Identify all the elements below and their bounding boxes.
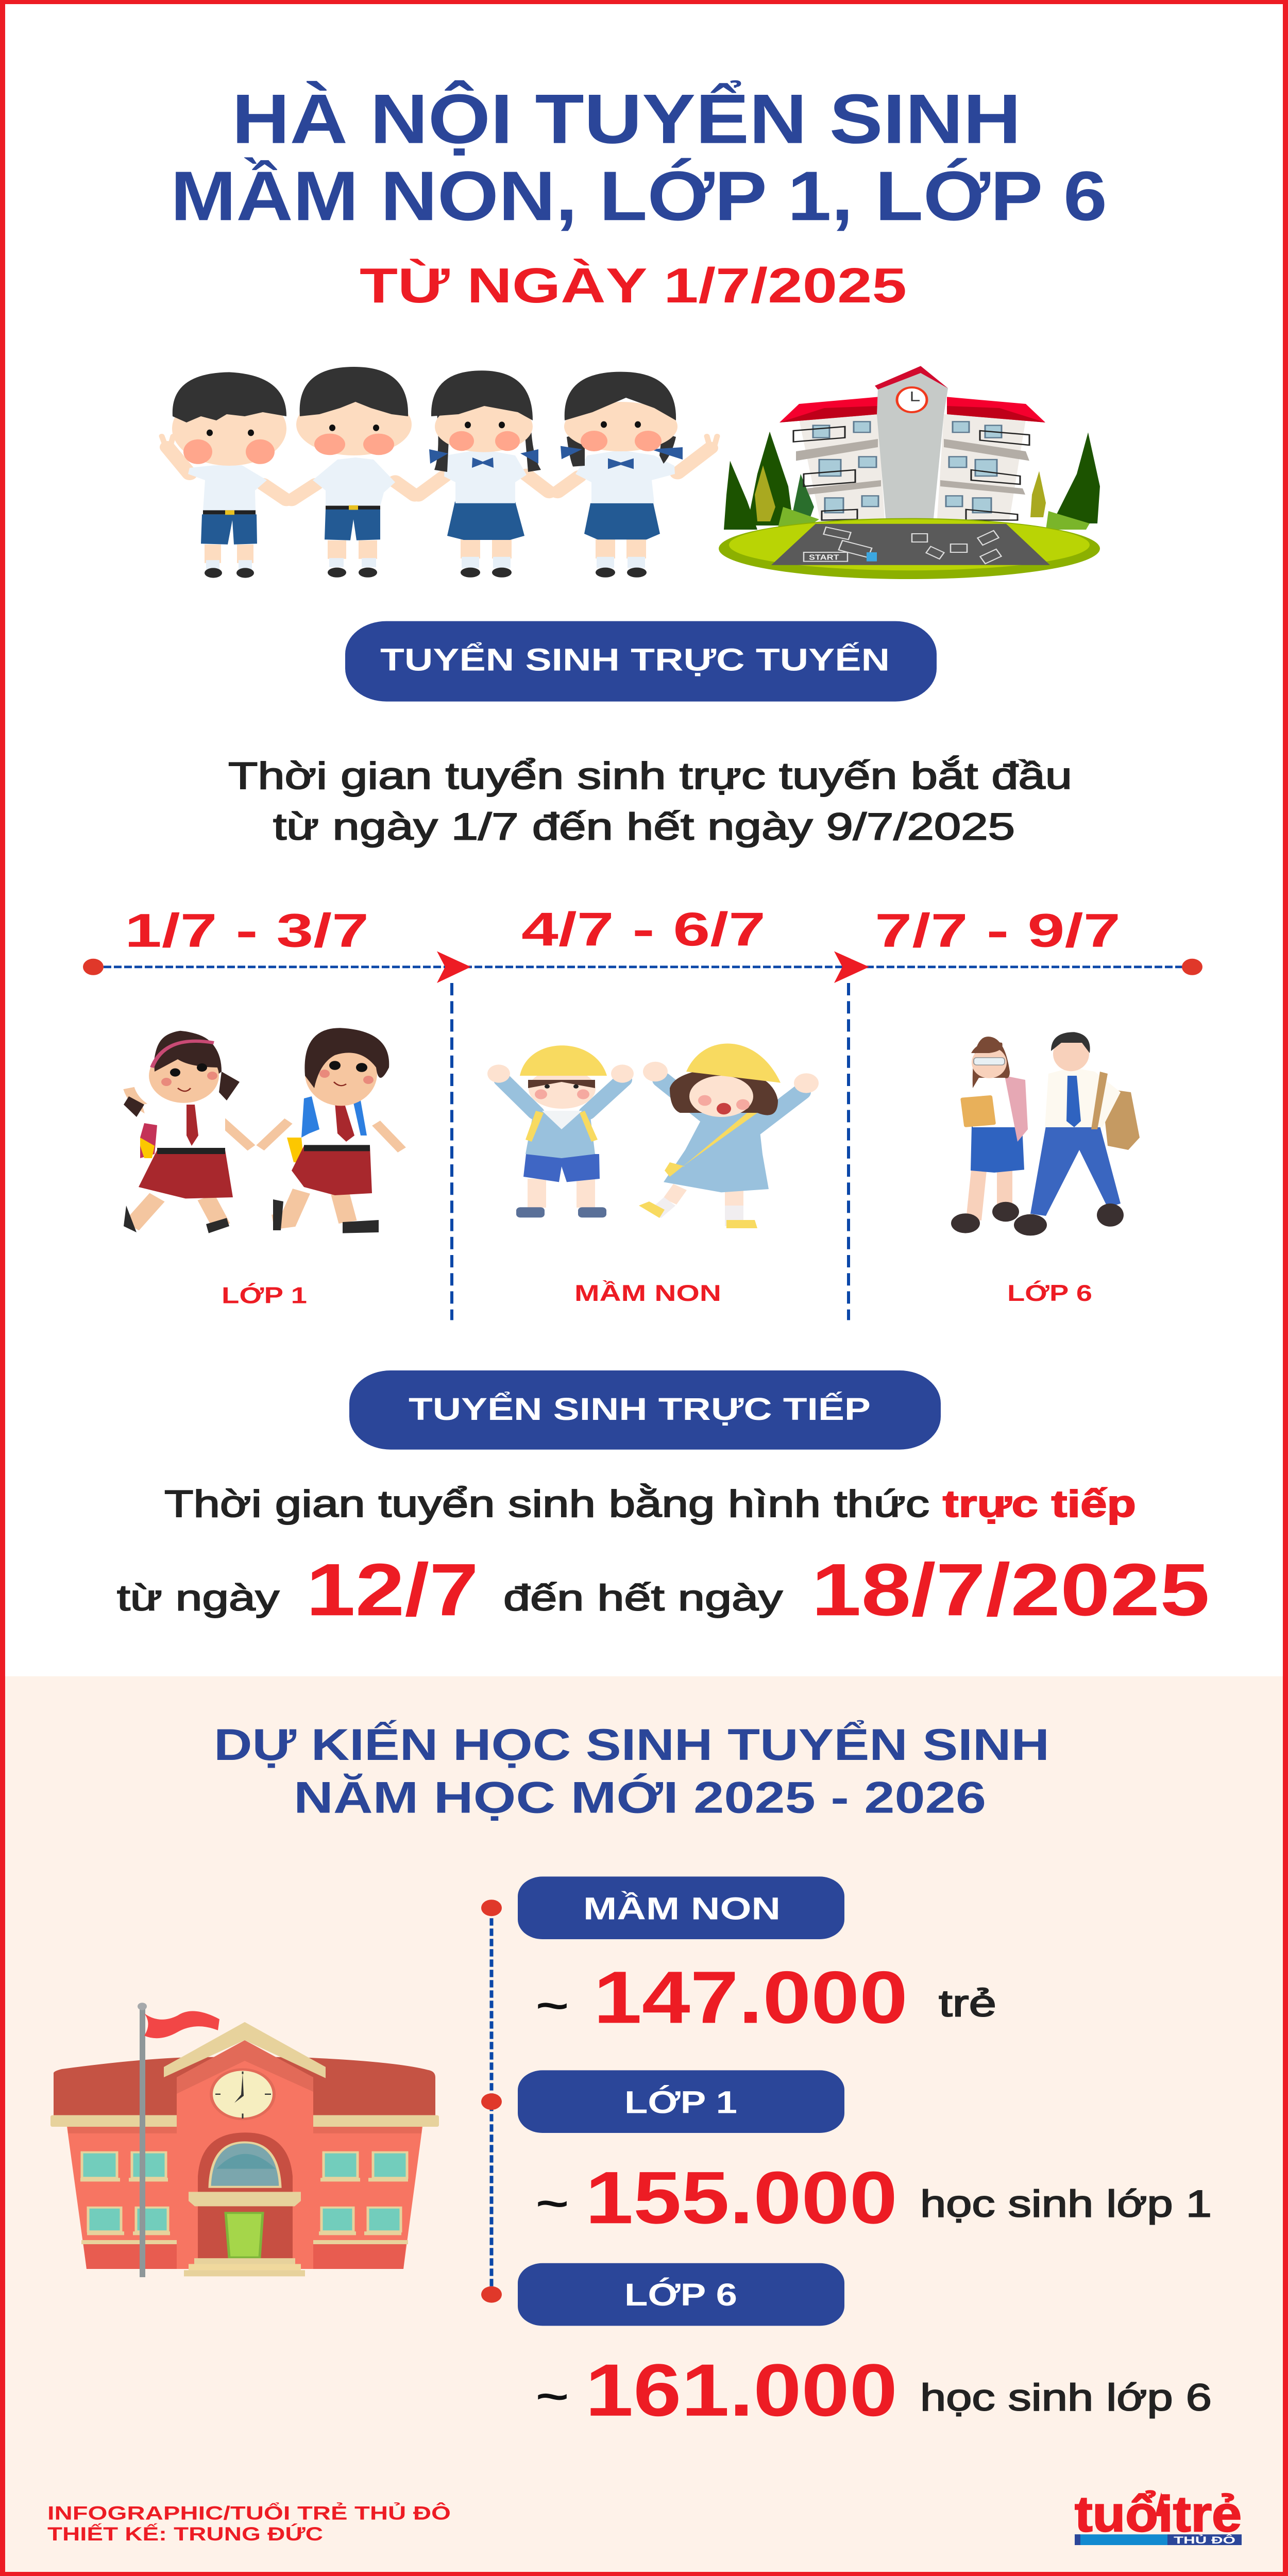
footer credits	[47, 2501, 451, 2545]
title: MẦM NON, LỚP 1, LỚP 6	[171, 157, 1107, 235]
direct admission dates: 18/7/2025	[811, 1548, 1210, 1631]
direct admission dates	[117, 1548, 1210, 1631]
date labels: 7/7 - 9/7	[875, 904, 1121, 957]
section heading: DỰ KIẾN HỌC SINH TUYỂN SINH	[214, 1719, 1049, 1770]
grade labels: LỚP 1	[222, 1282, 307, 1308]
pill: grade 6: LỚP 6	[624, 2277, 737, 2312]
direct admission dates: từ ngày	[117, 1578, 279, 1618]
boy 1	[172, 372, 286, 578]
online admission description	[228, 755, 1072, 848]
online admission description: từ ngày 1/7 đến hết ngày 9/7/2025	[273, 805, 1015, 848]
direct admission dates: 12/7	[306, 1548, 479, 1631]
pill: grade 6	[518, 2263, 844, 2326]
pill: kindergarten	[518, 1876, 844, 1939]
illustration: four students holding hands	[162, 367, 717, 578]
stat: kindergarten: 147.000	[594, 1956, 908, 2039]
pill: kindergarten: MẦM NON	[583, 1891, 781, 1926]
illustration: kindergarten children	[487, 1043, 819, 1228]
stat: grade 1	[536, 2156, 1212, 2239]
girl 2	[561, 372, 683, 578]
grade labels: MẦM NON	[574, 1280, 721, 1306]
stat: grade 6	[536, 2348, 1212, 2432]
pill: direct admission: TUYỂN SINH TRỰC TIẾP	[409, 1392, 871, 1427]
logo: Tuoi Tre Thu Do: tuổitrẻ	[1075, 2486, 1242, 2542]
stat: grade 6: ~	[536, 2374, 569, 2419]
date labels: 1/7 - 3/7	[125, 904, 369, 957]
date labels: 4/7 - 6/7	[521, 903, 766, 956]
stat: grade 1: ~	[536, 2180, 569, 2227]
stat: grade 6: 161.000	[585, 2348, 897, 2432]
pill: direct admission	[349, 1370, 941, 1450]
logo: Tuoi Tre Thu Do: THỦ ĐÔ	[1174, 2534, 1235, 2546]
illustration: school with clock tower: START	[809, 553, 839, 562]
stat: grade 1: 155.000	[585, 2156, 897, 2239]
stat: kindergarten: trẻ	[939, 1982, 996, 2025]
grade labels	[222, 1280, 1092, 1308]
title: HÀ NỘI TUYỂN SINH	[232, 80, 1021, 158]
section heading: NĂM HỌC MỚI 2025 - 2026	[294, 1772, 986, 1822]
footer credits: THIẾT KẾ: TRUNG ĐỨC	[47, 2523, 323, 2545]
pill: online admission	[345, 621, 937, 702]
girl 1	[429, 370, 541, 578]
pill: grade 1: LỚP 1	[624, 2085, 737, 2120]
vertical timeline	[481, 1900, 502, 2303]
section heading	[214, 1719, 1049, 1822]
direct admission description: Thời gian tuyển sinh bằng hình thức trực tiếp	[164, 1483, 1136, 1525]
panel: expected enrolment	[47, 1719, 1242, 2546]
boy 2	[296, 367, 412, 578]
stat: kindergarten: ~	[536, 1982, 569, 2029]
subtitle date: TỪ NGÀY 1/7/2025	[360, 258, 907, 313]
pill: online admission: TUYỂN SINH TRỰC TUYẾN	[380, 642, 890, 677]
stat: grade 6: học sinh lớp 6	[920, 2376, 1212, 2418]
illustration: grade 1 pupils	[124, 1028, 402, 1233]
illustration: grade 6 students	[951, 1032, 1140, 1235]
timeline with arrows	[83, 951, 1202, 1320]
stat: grade 1: học sinh lớp 1	[920, 2182, 1212, 2225]
grade labels: LỚP 6	[1007, 1280, 1092, 1306]
direct admission dates: đến hết ngày	[503, 1578, 783, 1618]
illustration: school with clock tower	[719, 366, 1100, 579]
title	[171, 80, 1107, 235]
online admission description: Thời gian tuyển sinh trực tuyến bắt đầu	[228, 755, 1072, 797]
illustration: red brick school	[50, 2003, 439, 2277]
date labels	[125, 903, 1121, 957]
footer credits: INFOGRAPHIC/TUỔI TRẺ THỦ ĐÔ	[47, 2501, 451, 2523]
pill: grade 1	[518, 2070, 844, 2133]
